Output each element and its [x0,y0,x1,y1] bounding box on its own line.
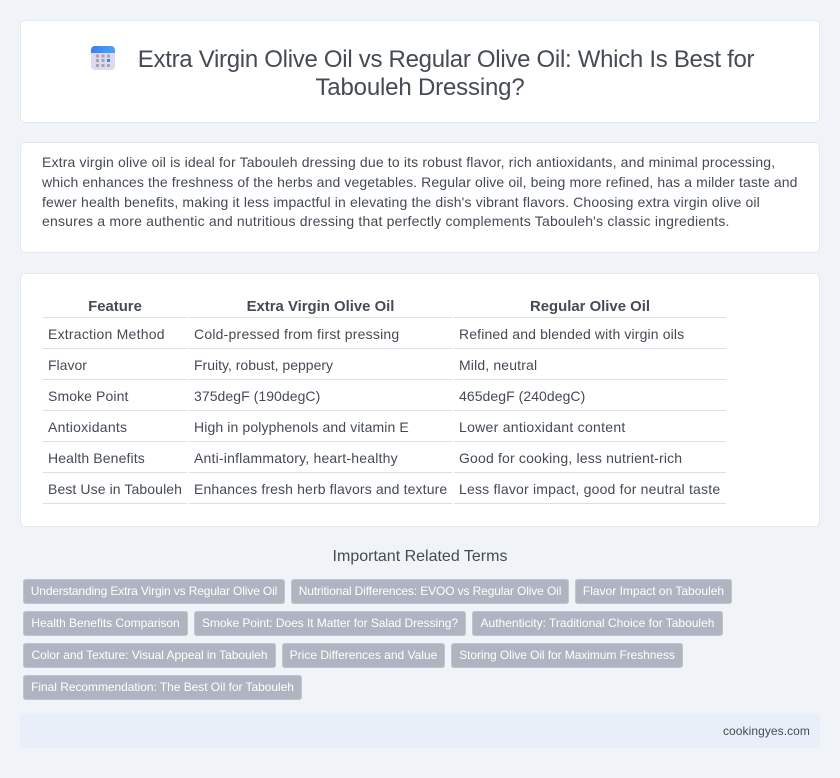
text block: introduction: fewer health benefits, making it less impactful in elevating the dish's vibrant flavors. Choosing extra virgin olive oil [42,194,760,210]
comparison table: Feature [88,299,142,315]
related terms tags [23,579,732,700]
comparison table: Good for cooking, less nutrient-rich [459,450,682,466]
panel: comparison table [20,273,820,527]
related terms tags: Nutritional Differences: EVOO vs Regular Olive Oil [299,584,561,598]
related terms tags: Final Recommendation: The Best Oil for Tabouleh [31,680,294,694]
comparison table: High in polyphenols and vitamin E [194,419,409,435]
comparison table: Extra Virgin Olive Oil [247,299,394,315]
related terms tags: Color and Texture: Visual Appeal in Tabouleh [32,648,267,662]
comparison table: Enhances fresh herb flavors and texture [194,481,447,497]
comparison table: Anti-inflammatory, heart-healthy [194,450,398,466]
comparison table: 375degF (190degC) [194,388,320,404]
comparison table [43,299,726,504]
text block: introduction [42,154,798,229]
comparison table: Cold-pressed from first pressing [194,326,399,342]
comparison table: Less flavor impact, good for neutral taste [459,481,720,497]
heading: important related terms: Important Related Terms [333,548,507,565]
comparison table: Smoke Point [48,388,128,404]
comparison table: 465degF (240degC) [459,388,585,404]
comparison table: Lower antioxidant content [459,419,626,435]
title: Extra Virgin Olive Oil vs Regular Olive Oil: Which Is Best for [138,46,754,73]
comparison table: Best Use in Tabouleh [48,481,182,497]
title [138,46,754,101]
related terms tags: Authenticity: Traditional Choice for Tabouleh [481,616,714,630]
comparison table: Health Benefits [48,450,145,466]
related terms tags: Flavor Impact on Tabouleh [583,584,724,598]
text block: introduction: which enhances the freshness of the herbs and vegetables. Regular olive oil, being more refined, has a milder taste and [42,174,798,190]
icon: calendar grid [91,46,115,70]
footer source label: cookingyes.com [723,724,810,738]
related terms tags: Storing Olive Oil for Maximum Freshness [459,648,675,662]
related terms tags: Understanding Extra Virgin vs Regular Olive Oil [31,584,277,598]
title: Tabouleh Dressing? [315,74,525,101]
comparison table: Flavor [48,357,87,373]
panel: title card [20,20,820,123]
related terms tags: Price Differences and Value [290,648,437,662]
comparison table: Mild, neutral [459,357,537,373]
comparison table: Refined and blended with virgin oils [459,326,684,342]
footer bar [20,714,820,748]
text block: introduction: ensures a more authentic and nutritious dressing that perfectly complements Tabouleh's classic ingredients. [42,213,730,229]
comparison table: Extraction Method [48,326,165,342]
comparison table: Fruity, robust, peppery [194,357,333,373]
related terms tags: Smoke Point: Does It Matter for Salad Dressing? [202,616,458,630]
panel: introduction text [20,142,820,253]
comparison table: Regular Olive Oil [530,299,650,315]
related terms tags: Health Benefits Comparison [31,616,180,630]
text block: introduction: Extra virgin olive oil is ideal for Tabouleh dressing due to its robust flavor, rich antioxidants, and minimal processing, [42,154,775,170]
comparison table: Antioxidants [48,419,127,435]
